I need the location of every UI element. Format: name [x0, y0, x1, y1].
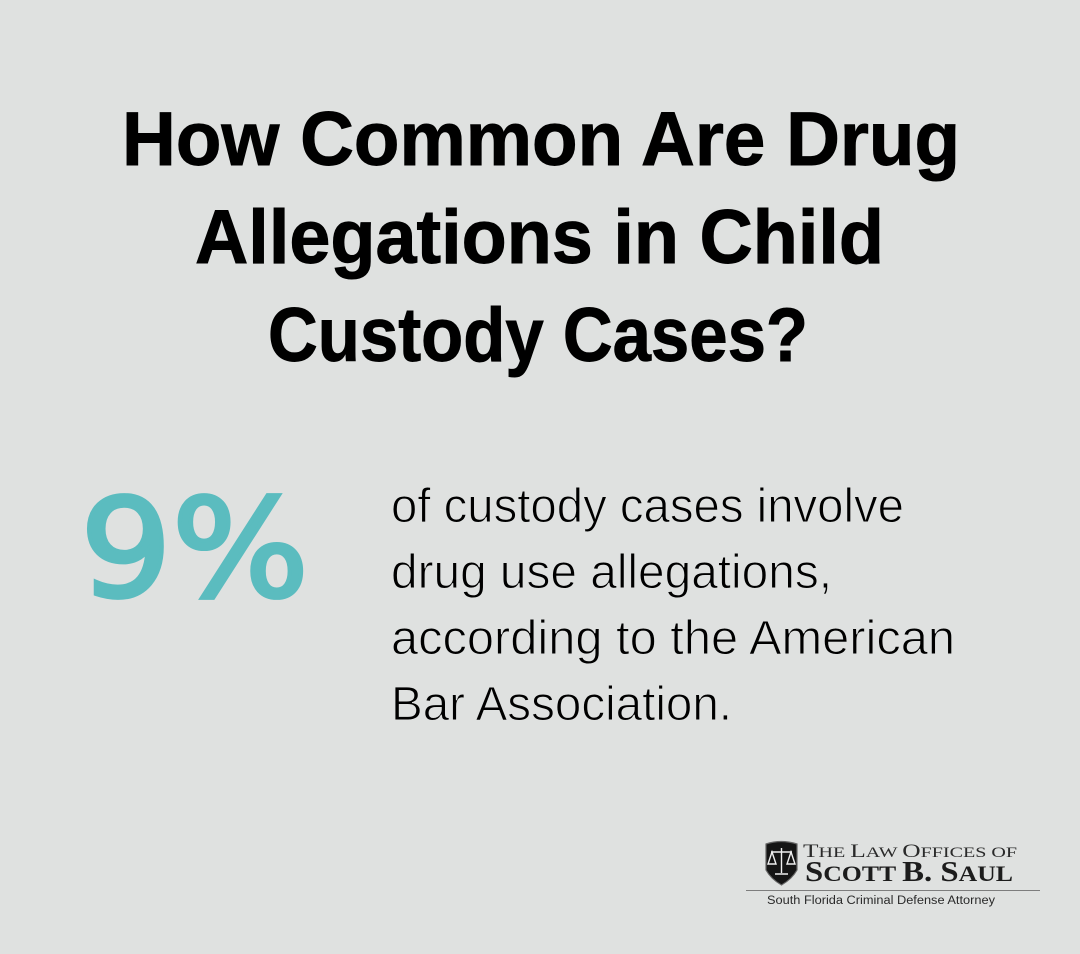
logo: The Law Offices of Scott B. Saul: [746, 841, 1040, 907]
statistic description: according to the American: [391, 612, 955, 665]
title: [122, 97, 960, 378]
statistic description: of custody cases involve: [391, 480, 904, 533]
logo tagline: South Florida Criminal Defense Attorney: [767, 895, 995, 907]
title: Custody Cases?: [268, 293, 808, 378]
statistic description: [391, 480, 955, 731]
title: How Common Are Drug: [122, 97, 960, 182]
statistic description: Bar Association.: [391, 678, 732, 731]
logo divider: [746, 890, 1040, 891]
statistic: 9%: 9%: [80, 471, 309, 629]
icon: shield with scales of justice: [766, 842, 797, 885]
logo text: the law offices of: T HE L AW O FFICES OF: [803, 841, 1017, 862]
title: Allegations in Child: [195, 195, 884, 280]
statistic description: drug use allegations,: [391, 546, 832, 599]
logo text: scott b. saul: SCOTT B. S AUL: [805, 857, 1013, 888]
